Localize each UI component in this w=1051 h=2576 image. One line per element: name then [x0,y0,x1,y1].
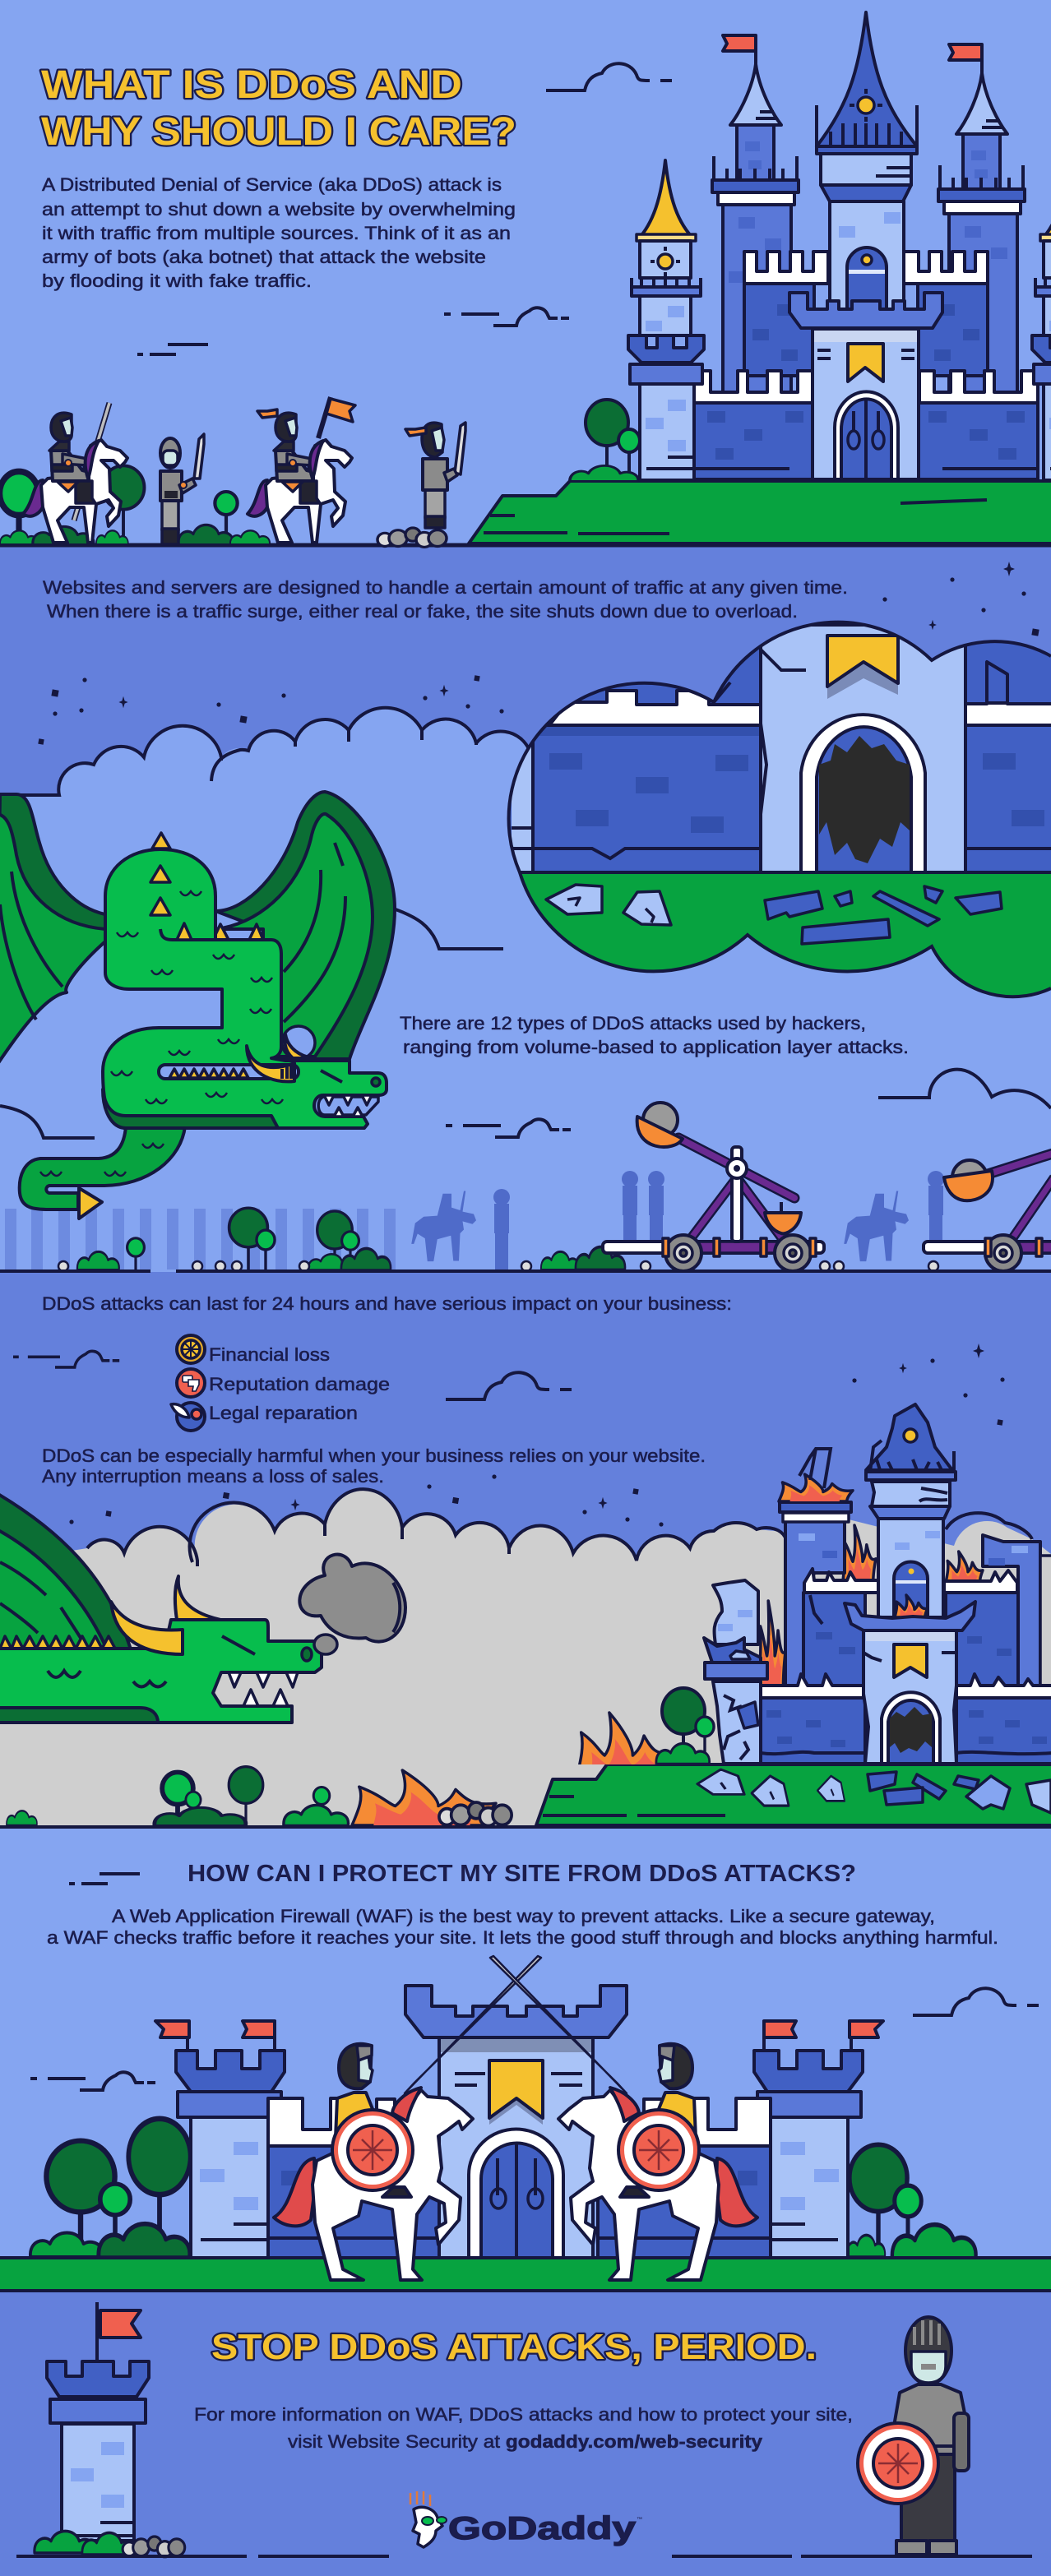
intro text block: army of bots (aka botnet) that attack the website [42,247,486,267]
army silhouettes and trees, section 2 [76,1171,944,1270]
text: traffic overload: When there is a traffic surge, either real or fake, the site shuts down due to overload. [47,601,798,622]
icon: reputation damage [177,1369,205,1397]
dragon spikes [0,1636,115,1649]
soldier silhouette rows [5,1209,396,1270]
ground: section 1 hill [469,481,1051,543]
dragon back spikes on body [160,929,215,940]
trademark: ™ [637,2517,642,2523]
call to action text: For more information on WAF, DDoS attacks and how to protect your site, [194,2404,853,2425]
stones, section 2 [58,1261,938,1271]
ground strip [0,2258,1051,2291]
knight on horse with lance [23,403,127,543]
foot knight with plume [405,423,465,528]
dragon wing [0,1493,131,1649]
title: WHAT IS DDoS AND [41,63,462,107]
stone pile [439,1802,512,1826]
rubble [697,1769,1051,1813]
dragon face details [48,1632,312,1706]
smoke puff [299,1555,405,1654]
bushes [7,1805,348,1825]
damaged upper walls [803,1569,1018,1687]
title: WHY SHOULD I CARE? [41,110,516,154]
foot knight with sword [160,434,204,544]
gate tower [863,1630,956,1764]
grey smoke cloud [0,1489,1051,1826]
dragon head and neck [0,1620,322,1723]
panel: traffic overload (light sky behind dragon) [0,708,1051,1272]
window fire [895,1595,928,1617]
title [41,63,516,154]
damaged lower walls [761,1674,1051,1764]
flames behind castle [759,1525,1051,1690]
ground fire [352,1770,496,1825]
stop DDoS heading: STOP DDoS ATTACKS, PERIOD. [211,2327,817,2367]
text: 12 types of attacks: There are 12 types of DDoS attacks used by hackers, [400,1013,866,1034]
castle trees [30,2119,976,2278]
text: harmful to business [42,1445,706,1487]
small clouds, section 3 [13,1351,572,1399]
attacking army: knights, trees and stones [0,396,467,548]
dragon mouth, back spikes row [159,1065,299,1079]
dragon tail [20,1126,185,1219]
left knight on horse [274,1956,541,2280]
text: harmful to business: Any interruption means a loss of sales. [42,1466,384,1487]
ground base line section 1 [0,543,1051,548]
damaged crown piece [845,1602,975,1630]
ruined left tower [704,1580,767,1764]
label: reputation damage: Reputation damage [209,1374,390,1394]
gate tower [405,1986,627,2258]
text: harmful to business: DDoS can be especially harmful when your business relies on your website. [42,1445,706,1466]
trees [126,1207,360,1270]
intro text block: it with traffic from multiple sources. Think of it as an [42,223,511,243]
stone pile [377,528,447,547]
WAF explanation: A Web Application Firewall (WAF) is the best way to prevent attacks. Like a secure gateway, [112,1906,935,1926]
small stars, section 3 [69,1343,1005,1531]
tower fire [779,1474,853,1501]
label: financial loss: Financial loss [209,1344,330,1365]
burning castle [536,1404,1051,1825]
broken door planks [765,886,1002,944]
small clouds, section 4 [30,1874,1039,2090]
left yellow-roof tower [628,160,704,480]
small stars, section 2 [38,562,1039,745]
intro text block: by flooding it with fake traffic. [42,271,312,291]
damaged side towers [780,1502,1051,1686]
attacking dragon, breathing smoke [0,1493,405,1723]
trees [160,1765,331,1822]
dragon large horn [111,1602,183,1654]
hill: section 3 [536,1764,1051,1825]
silhouette cavalry and foot soldiers [411,1171,944,1270]
dragon head spikes [150,833,263,940]
dragon jaw and teeth [318,1071,380,1117]
WAF explanation: a WAF checks traffic before it reaches your site. It lets the good stuff through and blocks anything harmful. [47,1927,998,1948]
ground line section 3 [0,1825,1051,1829]
text: traffic overload: Websites and servers are designed to handle a certain amount of traffic at any given time. [43,577,848,598]
dragon small horn [175,1576,220,1620]
standing knight with shield [858,2317,969,2555]
dragon belly stripe [103,1089,278,1128]
heading: how can I protect: HOW CAN I PROTECT MY SITE FROM DDoS ATTACKS? [188,1861,856,1887]
catapult 1 [603,1103,824,1271]
logo: GoDaddy [410,2491,642,2547]
spire cones and flags [723,35,1007,134]
icon: legal reparation [171,1403,205,1431]
spikes over body [150,866,192,940]
text: traffic overload [43,577,848,622]
dragon body and head [103,849,387,1128]
dragon [0,792,395,1219]
background trees and bushes [0,464,271,543]
intro text block: A Distributed Denial of Service (aka DDoS) attack is [42,174,502,195]
panel: impact text: DDoS attacks can last for 24 hours and have serious impact on your business: [42,1293,732,1314]
wordmark: GoDaddy [448,2511,636,2546]
center tower with broken spire [866,1404,956,1617]
castle with spires [570,12,1051,488]
dragon belly stripe [0,1708,158,1723]
text: 12 types of attacks: ranging from volume-based to application layer attacks. [403,1037,909,1057]
castle trees [570,400,640,488]
lone tower with flag [35,2302,185,2557]
intro text block: an attempt to shut down a website by overwhelming [42,199,516,220]
foreground: fire, trees and stones, section 3 [6,1765,513,1825]
castle tree and flame on hill [578,1686,715,1764]
intro text block [42,174,516,291]
dragon horns [247,1034,313,1081]
protected castle [0,1956,1051,2291]
right knight on horse [490,1956,757,2280]
small clouds, section 2 [0,909,1051,1138]
impact list [171,1335,390,1431]
call to action text [194,2404,853,2452]
text: 12 types of attacks [400,1013,909,1057]
footer ground line [16,2555,1032,2558]
broken turret frame [799,1449,831,1488]
icon: financial loss coin [177,1335,205,1363]
rubble rocks [546,885,671,925]
mascot [410,2491,447,2547]
catapult 2, cropped [924,1154,1051,1271]
dragon scales [111,891,283,1103]
label: legal reparation: Legal reparation [209,1403,358,1423]
knight on horse with flag [248,397,355,543]
far right tower, cropped [1032,160,1051,480]
bushes [77,1246,625,1270]
ground line section 2 [0,1270,1051,1273]
small clouds, section 1 [137,63,672,354]
hill detail strokes [543,1797,725,1815]
call to action text: visit Website Security at godaddy.com/web-security [288,2431,763,2452]
WAF explanation [47,1906,998,1948]
side towers and walls [155,2020,441,2258]
dragon wings [0,792,395,1066]
hill detail strokes [484,500,987,534]
castle body [694,12,1038,479]
thought bubble: damaged castle gate [493,622,1051,1012]
